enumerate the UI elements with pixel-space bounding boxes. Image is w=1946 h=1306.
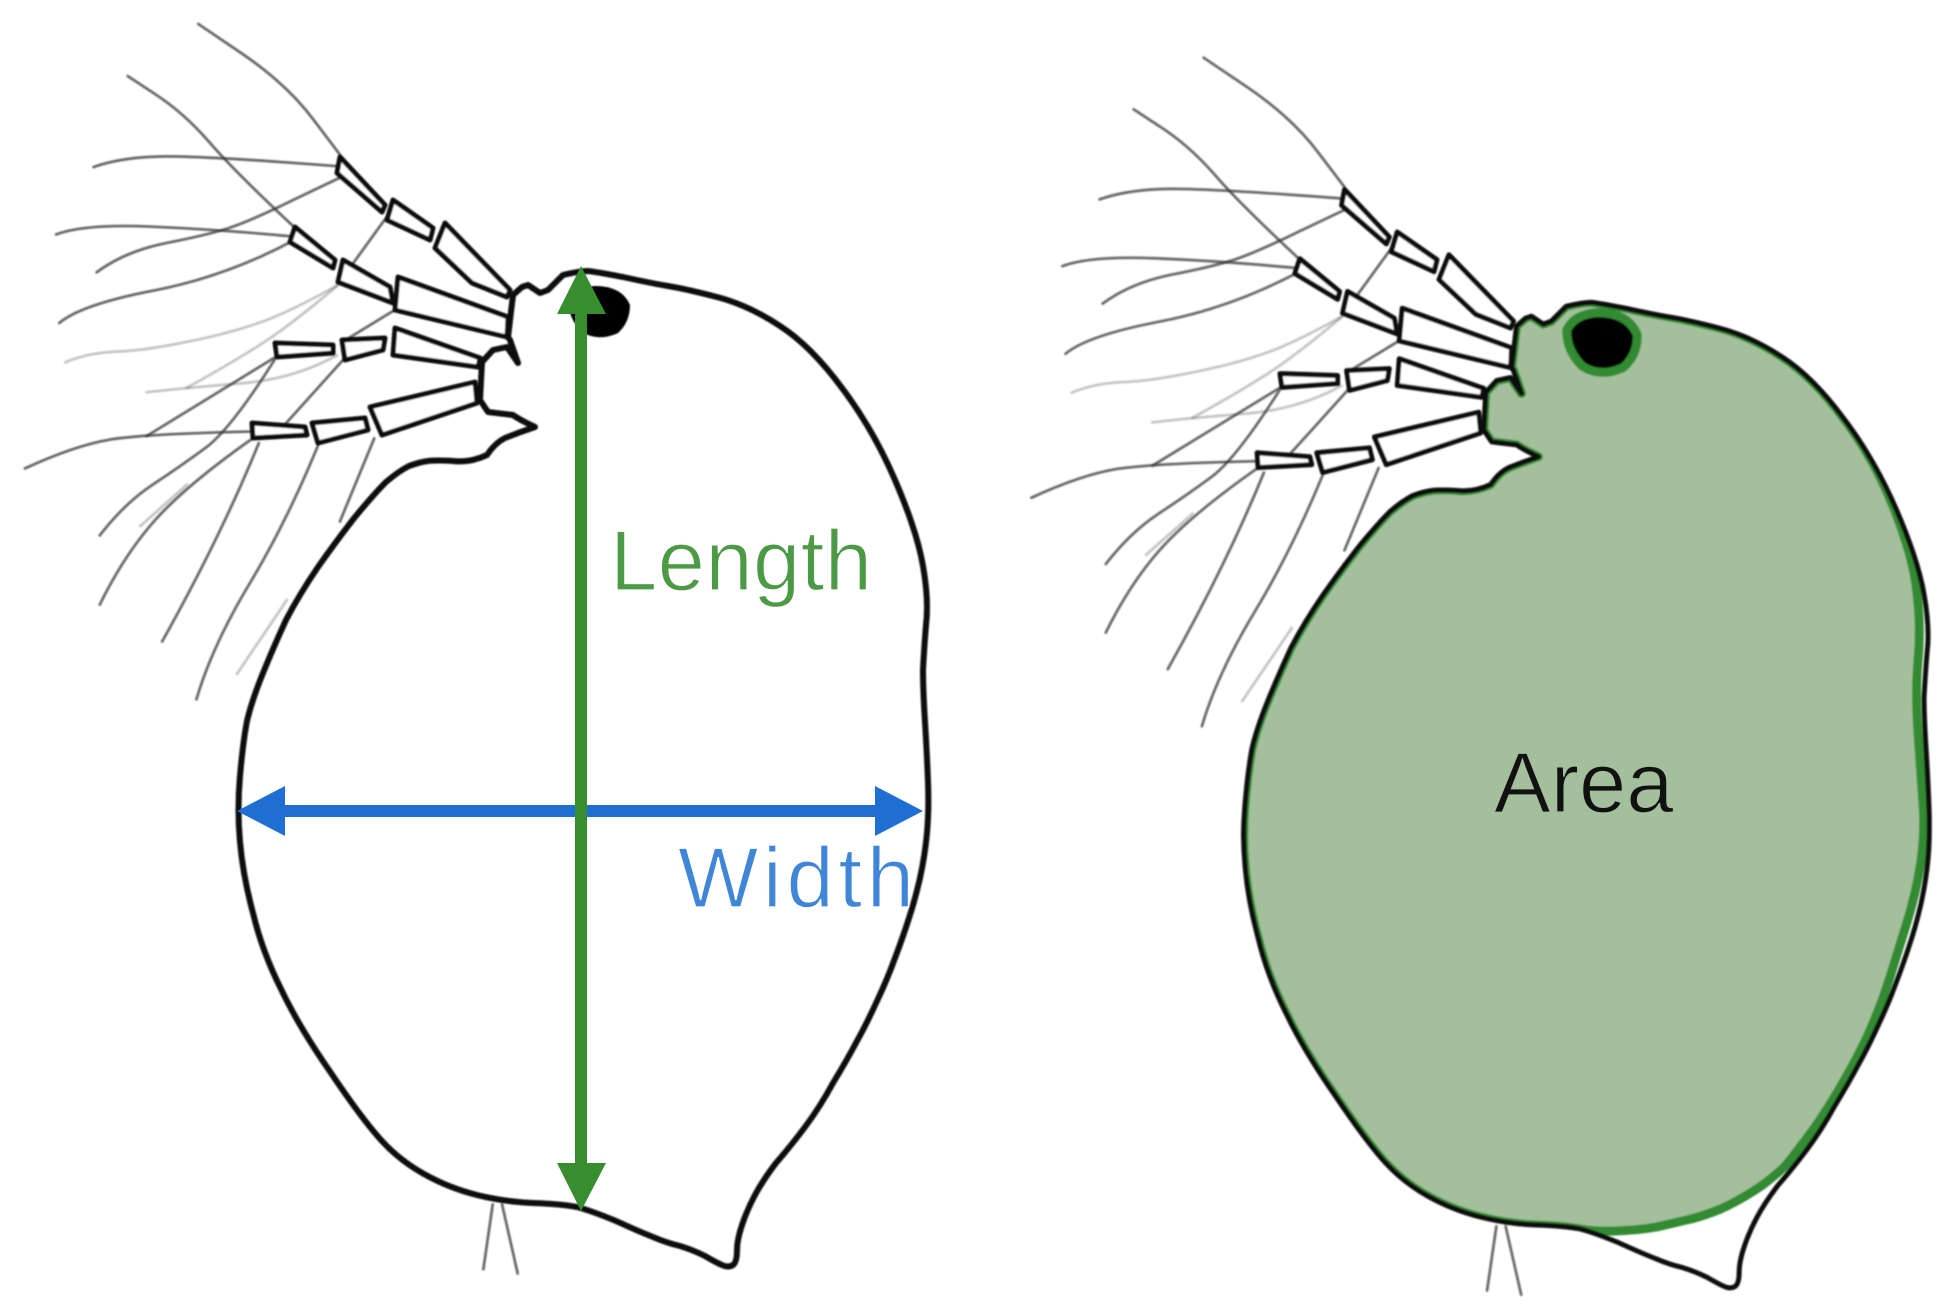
eye with green halo: [1571, 317, 1633, 368]
width arrow: [237, 786, 923, 836]
label: Area: Area: [1494, 736, 1674, 831]
length arrow: [557, 266, 606, 1211]
label: Length: Length: [610, 514, 872, 609]
antenna segments: [252, 157, 510, 443]
tail setae: [483, 1204, 518, 1273]
daphnia filled drawing: [1031, 58, 1929, 1295]
tail setae: [1487, 1226, 1521, 1295]
antenna segments: [1257, 189, 1514, 473]
daphnia outline drawing: [25, 24, 928, 1273]
body outline: [1244, 302, 1929, 1288]
panel: area measurement: [1031, 58, 1929, 1295]
green area fill: [1244, 302, 1924, 1231]
label: Width: Width: [678, 831, 914, 926]
eye: [568, 286, 630, 337]
antenna setae: [25, 24, 396, 699]
panel: length and width measurement: [25, 24, 928, 1273]
body outline: [238, 271, 928, 1266]
antenna setae: [1031, 58, 1400, 726]
